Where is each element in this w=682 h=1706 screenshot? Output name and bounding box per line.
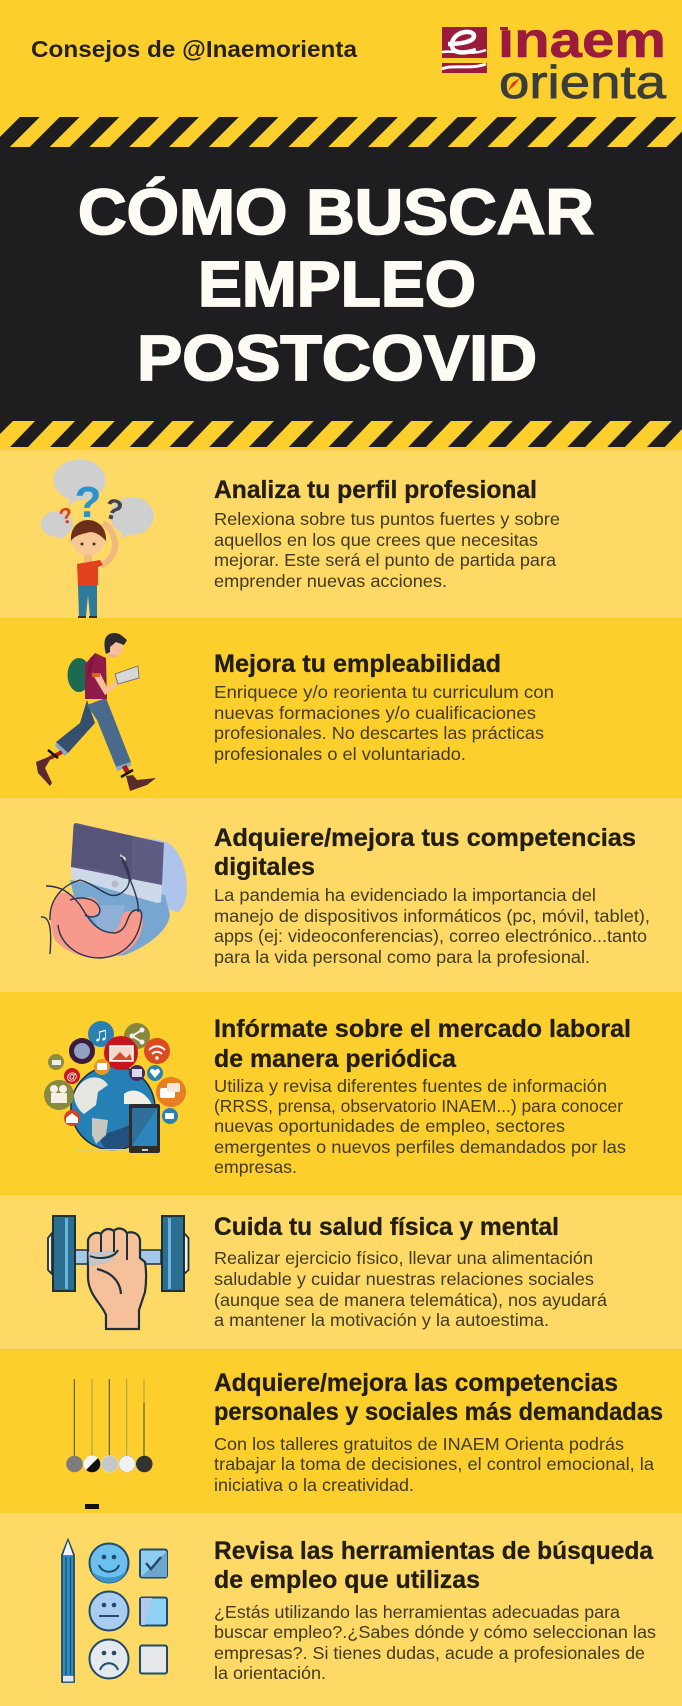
body text xyxy=(214,509,560,591)
body text: mejorar. Este será el punto de partida para xyxy=(214,550,556,570)
heading: personales y sociales más demandadas xyxy=(214,1398,663,1426)
icon: newton cradle xyxy=(66,1379,153,1509)
body text: manejo de dispositivos informáticos (pc, móvil, tablet), xyxy=(214,906,650,926)
icon: hands on computer xyxy=(41,823,187,958)
title xyxy=(78,176,594,394)
body text: aquellos en los que crees que necesitas xyxy=(214,530,538,550)
body text: para la vida personal como para la profesional. xyxy=(214,947,590,967)
panel: salud fisica y mental xyxy=(0,1195,682,1349)
body text xyxy=(214,1076,626,1177)
panel: competencias digitales xyxy=(0,798,682,992)
icon: thinking boy xyxy=(41,460,154,619)
body text: profesionales o el voluntariado. xyxy=(214,744,466,764)
body text: nuevas oportunidades de empleo, sectores xyxy=(214,1116,565,1136)
heading: de empleo que utilizas xyxy=(214,1566,480,1594)
body text: ¿Estás utilizando las herramientas adecuadas para xyxy=(214,1602,620,1622)
icon: globe and social network bubbles: ♫ xyxy=(94,1024,108,1046)
body text xyxy=(214,1248,607,1330)
icon: globe and social network bubbles: @ xyxy=(67,1071,78,1083)
heading xyxy=(214,824,636,881)
body text: iniciativa o la creatividad. xyxy=(214,1475,414,1495)
body text: saludable y cuidar nuestras relaciones sociales xyxy=(214,1269,594,1289)
body text xyxy=(214,1602,656,1683)
panel: mercado laboral xyxy=(0,992,682,1195)
body text: Con los talleres gratuitos de INAEM Orienta podrás xyxy=(214,1434,624,1454)
icon: thinking boy: ? xyxy=(75,478,101,527)
icon: thinking boy: ? xyxy=(56,502,76,530)
body text: empresas?. Si tienes dudas, acude a profesionales de xyxy=(214,1643,645,1663)
body text xyxy=(214,885,650,967)
heading xyxy=(214,1369,663,1426)
title: POSTCOVID xyxy=(137,322,537,394)
body text: Enriquece y/o reorienta tu curriculum con xyxy=(214,682,554,702)
icon: thinking boy: ? xyxy=(101,493,126,528)
body text: nuevas formaciones y/o cualificaciones xyxy=(214,703,536,723)
icon: walking student xyxy=(36,633,156,791)
hazard stripes bottom xyxy=(0,421,682,450)
body text xyxy=(214,682,554,764)
hazard stripes top xyxy=(0,117,682,147)
body text: Utiliza y revisa diferentes fuentes de información xyxy=(214,1076,607,1096)
body text: (aunque sea de manera telemática), nos ayudará xyxy=(214,1290,607,1310)
logo: INAEM Orienta: inaem xyxy=(498,12,666,68)
heading: Analiza tu perfil profesional xyxy=(214,476,537,504)
body text: La pandemia ha evidenciado la importancia del xyxy=(214,885,596,905)
body text: apps (ej: videoconferencias), correo electrónico...tanto xyxy=(214,926,647,946)
icon: fist holding dumbbell xyxy=(48,1216,188,1329)
body text: (RRSS, prensa, observatorio INAEM...) para conocer xyxy=(214,1096,623,1116)
icon: globe and social network bubbles xyxy=(44,1021,186,1153)
panel: header xyxy=(32,27,666,99)
logo: INAEM Orienta xyxy=(441,27,666,99)
body text: emprender nuevas acciones. xyxy=(214,571,447,591)
body text: trabajar la toma de decisiones, el control emocional, la xyxy=(214,1454,654,1474)
panel: title block xyxy=(0,117,682,450)
heading: Infórmate sobre el mercado laboral xyxy=(214,1015,631,1043)
panel: herramientas de busqueda xyxy=(0,1513,682,1706)
title: CÓMO BUSCAR xyxy=(78,176,594,248)
panel: mejora tu empleabilidad xyxy=(0,618,682,798)
body text: Realizar ejercicio físico, llevar una alimentación xyxy=(214,1248,593,1268)
heading: Adquiere/mejora tus competencias xyxy=(214,824,636,852)
heading: de manera periódica xyxy=(214,1045,457,1073)
heading: Mejora tu empleabilidad xyxy=(214,650,501,678)
heading xyxy=(214,1537,654,1594)
body text xyxy=(214,1434,654,1495)
body text: buscar empleo?.¿Sabes dónde y cómo seleccionan las xyxy=(214,1622,656,1642)
title: EMPLEO xyxy=(198,248,476,320)
heading: Adquiere/mejora las competencias xyxy=(214,1369,618,1397)
heading: Cuida tu salud física y mental xyxy=(214,1213,559,1241)
body text: emergentes o nuevos perfiles demandados por las xyxy=(214,1137,626,1157)
heading xyxy=(214,1015,631,1073)
panel: analiza tu perfil xyxy=(0,450,682,619)
body text: Relexiona sobre tus puntos fuertes y sobre xyxy=(214,509,560,529)
body text: empresas. xyxy=(214,1157,297,1177)
body text: a mantener la motivación y la autoestima. xyxy=(214,1310,549,1330)
heading: digitales xyxy=(214,853,315,881)
body text: la orientación. xyxy=(214,1663,326,1683)
logo: INAEM Orienta: orienta xyxy=(499,56,666,108)
heading: Revisa las herramientas de búsqueda xyxy=(214,1537,654,1565)
icon: pencil and mood checklist xyxy=(62,1540,167,1682)
body text: profesionales. No descartes las prácticas xyxy=(214,723,544,743)
panel: competencias personales y sociales xyxy=(0,1349,682,1513)
header credit text: Consejos de @Inaemorienta xyxy=(31,36,357,62)
